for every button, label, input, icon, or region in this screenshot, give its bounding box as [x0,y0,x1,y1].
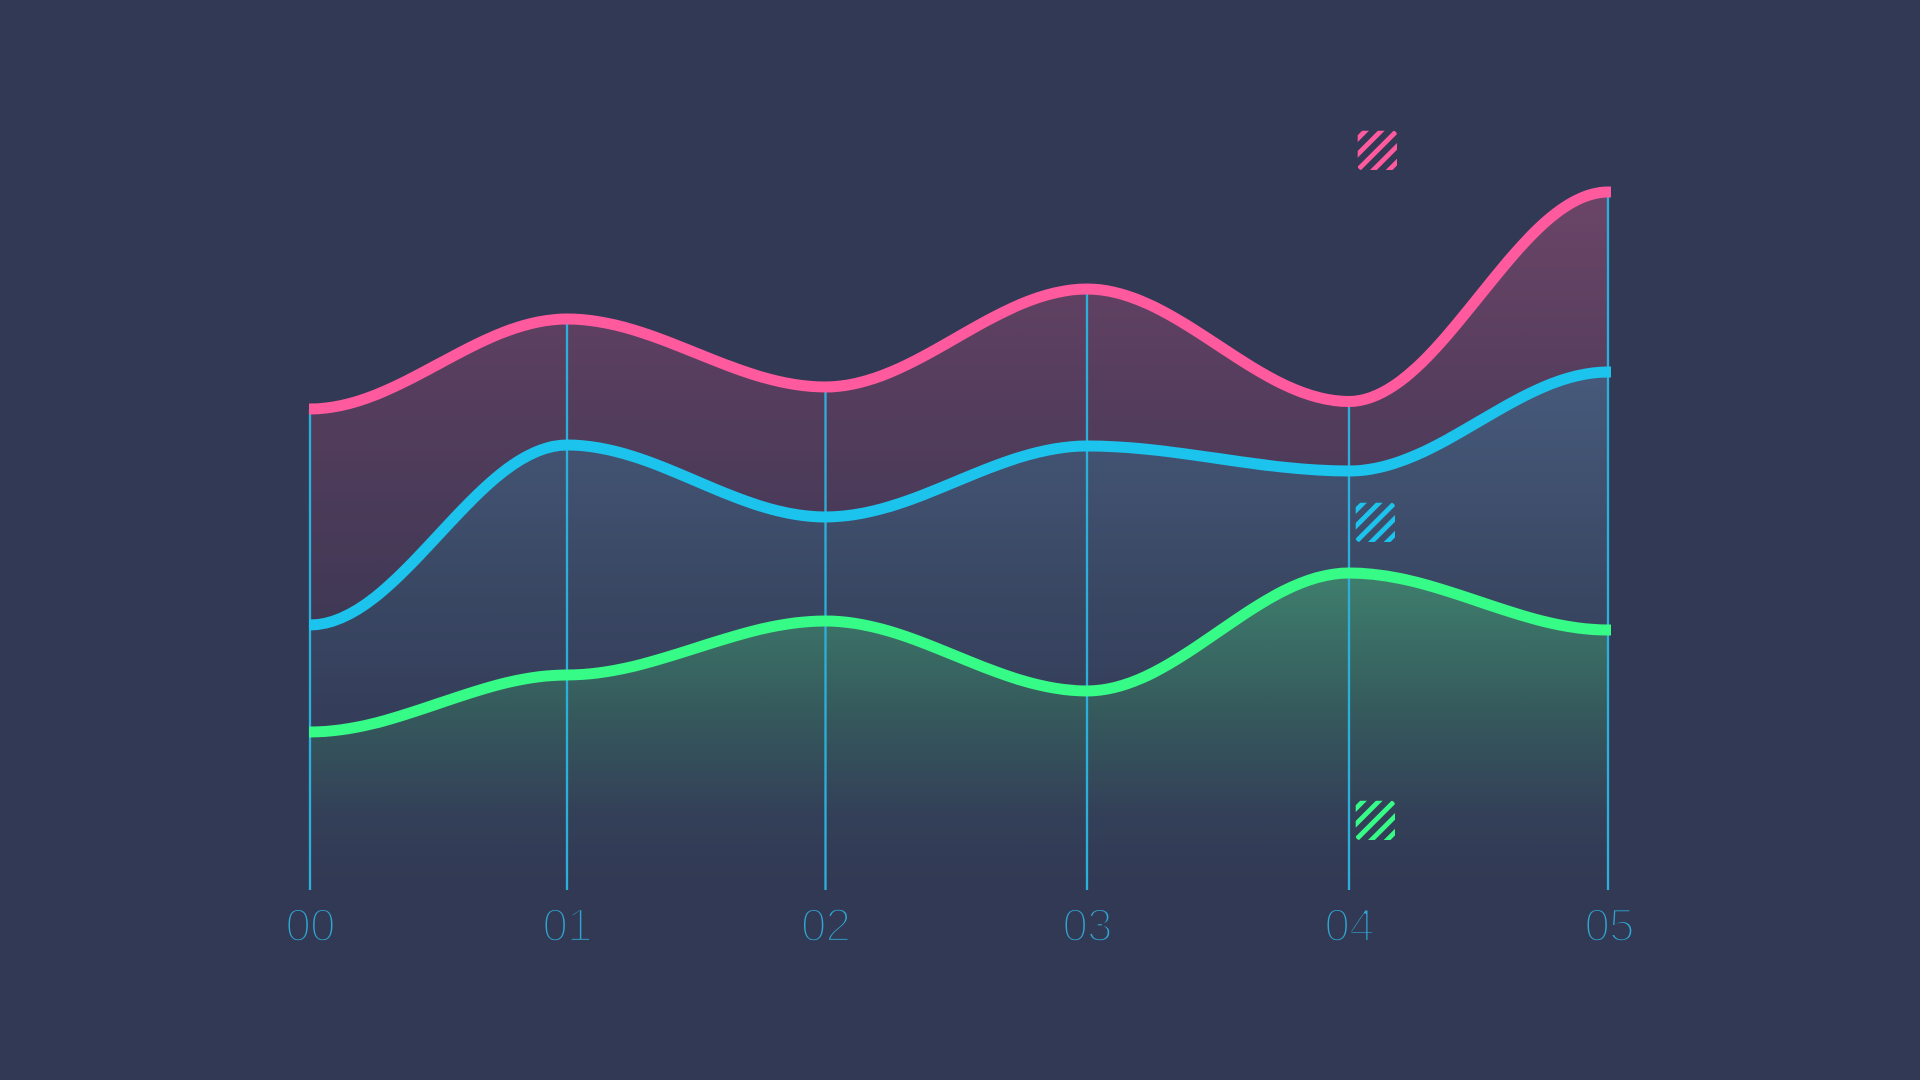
area: pink series [310,192,1608,890]
area: blue series [310,372,1608,890]
icon: blue hatch marker [1356,502,1395,542]
line: pink series [309,192,1611,409]
icon: green hatch marker [1356,800,1395,840]
axis labels: 05 [1584,899,1634,951]
axis labels [285,899,1634,951]
axis labels: 02 [801,899,850,951]
axis labels: 01 [542,899,592,951]
axis labels: 03 [1062,899,1112,951]
axis labels: 04 [1324,899,1374,951]
axis labels: 00 [285,899,335,951]
line: blue series [309,372,1611,625]
icon: pink hatch marker [1358,130,1397,170]
stacked area chart [288,130,1632,940]
vertical grid lines [310,192,1608,890]
line: green series [309,573,1611,732]
area: green series [310,573,1608,890]
